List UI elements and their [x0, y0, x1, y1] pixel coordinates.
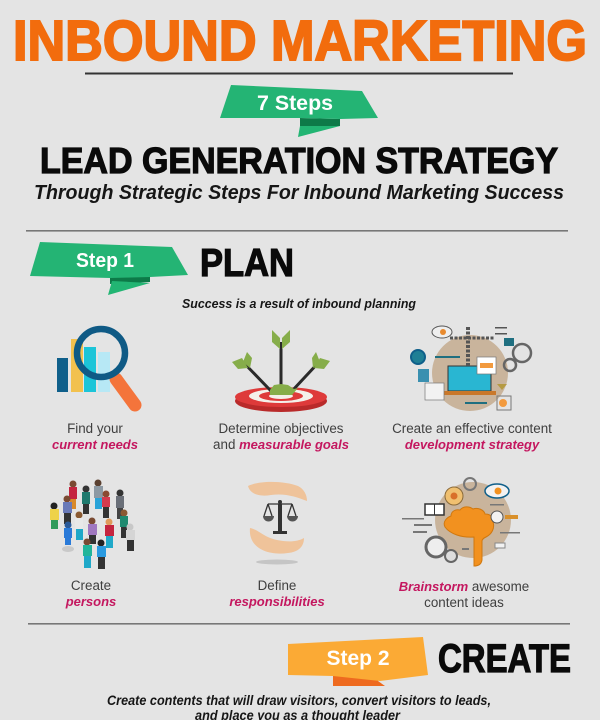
caption: responsibilities: Define	[258, 578, 296, 593]
caption: responsibilities	[229, 578, 325, 609]
ribbon: step 2	[288, 637, 428, 686]
caption: brainstorm	[399, 579, 529, 610]
heading: create: CREATE	[438, 637, 571, 681]
caption: brainstorm: content ideas	[424, 595, 504, 610]
ribbon: step 1	[30, 242, 188, 295]
icon: content development strategy	[411, 326, 531, 411]
caption: measurable goals: Determine objectives	[218, 421, 344, 436]
ribbon: 7 Steps	[220, 85, 378, 137]
caption: development strategy	[392, 421, 552, 452]
ribbon: step 1: Step 1	[76, 250, 134, 272]
caption: current needs: Find your	[67, 421, 123, 436]
icon: brain with ideas	[402, 478, 520, 566]
ribbon: 7 Steps: 7 Steps	[257, 92, 333, 115]
icon: hands and scales	[248, 482, 307, 564]
text: create intro: Create contents that will draw visitors, convert visitors to leads,	[107, 693, 491, 708]
caption: development strategy: development strategy	[405, 437, 540, 452]
icon: group of people	[50, 480, 135, 569]
caption: measurable goals: and measurable goals	[213, 437, 349, 452]
caption: development strategy: Create an effective content	[392, 421, 552, 436]
icon: target with arrows	[232, 330, 330, 412]
caption: measurable goals	[213, 421, 349, 452]
caption: persons: Create	[71, 578, 111, 593]
subheading: Through Strategic Steps For Inbound Marketing Success	[34, 182, 564, 204]
caption: persons: persons	[65, 594, 116, 609]
heading: lead generation strategy: LEAD GENERATION STRATEGY	[40, 140, 558, 181]
icon: magnifier over bars	[57, 329, 135, 405]
caption: persons	[65, 578, 116, 609]
text: create intro	[107, 693, 491, 720]
heading: plan: PLAN	[200, 242, 294, 285]
text: plan intro: Success is a result of inbound planning	[182, 296, 416, 311]
caption: current needs	[52, 421, 138, 452]
caption: responsibilities: responsibilities	[229, 594, 325, 609]
ribbon: step 2: Step 2	[326, 647, 390, 670]
caption: current needs: current needs	[52, 437, 138, 452]
caption: brainstorm: Brainstorm awesome	[399, 579, 529, 594]
